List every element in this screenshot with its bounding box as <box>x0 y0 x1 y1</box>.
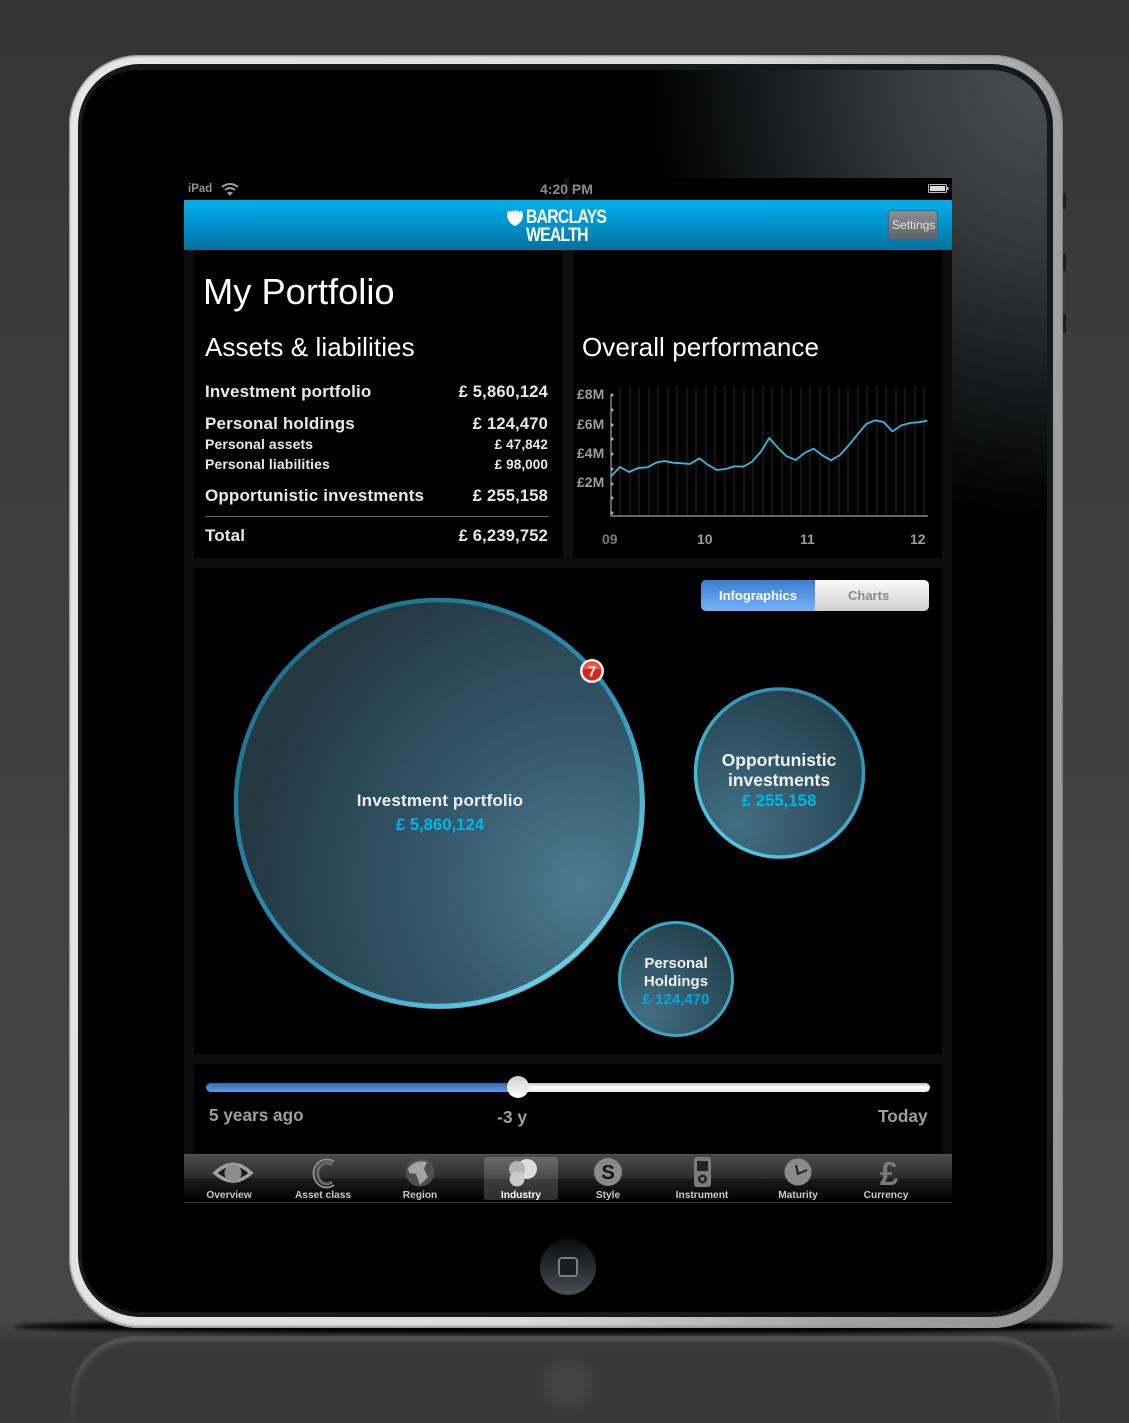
title: My Portfolio <box>203 271 395 312</box>
logo text <box>526 207 606 246</box>
slider knob <box>507 1076 529 1098</box>
badge <box>580 659 604 683</box>
carrier label: iPad <box>188 183 212 195</box>
tab label: Style <box>596 1190 620 1201</box>
tab icons <box>212 1155 899 1190</box>
tab label: Overview <box>206 1190 252 1201</box>
row value: £ 98,000 <box>495 457 548 472</box>
line chart: 10 <box>697 531 713 547</box>
row value: £ 255,158 <box>473 487 548 505</box>
panel: assets <box>194 250 563 558</box>
bubble: opportunistic investments <box>696 689 864 857</box>
tab label: Instrument <box>676 1190 728 1201</box>
heading: assets: Assets & liabilities <box>205 332 415 362</box>
tabs: infographics selected <box>701 580 815 611</box>
industry tab highlight <box>484 1157 558 1200</box>
status bar <box>184 178 952 200</box>
icon: clock <box>784 1158 812 1186</box>
bubble labels: Holdings <box>644 973 708 990</box>
tabs: charts <box>815 580 929 611</box>
badge: 7 <box>588 664 596 680</box>
divider <box>205 516 549 517</box>
panel: slider <box>194 1064 942 1154</box>
icon: industry circles <box>509 1159 537 1186</box>
line chart: £6M <box>577 416 604 432</box>
line chart: 12 <box>910 531 926 547</box>
glare <box>82 70 1047 670</box>
bubble labels: investments <box>728 770 830 790</box>
table: assets and liabilities <box>205 382 549 545</box>
heading: performance: Overall performance <box>582 332 819 362</box>
device bezel <box>78 64 1053 1317</box>
row label: Personal liabilities <box>205 456 330 472</box>
panel: infographic <box>194 568 942 1054</box>
row label: Investment portfolio <box>205 382 371 401</box>
side buttons <box>1063 193 1066 209</box>
device reflection <box>70 1336 1060 1409</box>
settings button <box>888 210 938 240</box>
logo text: BARCLAYS <box>526 207 606 228</box>
line chart: £2M <box>577 474 604 490</box>
row value: £ 5,860,124 <box>459 383 548 401</box>
screen <box>184 178 952 1203</box>
slider start label: 5 years ago <box>209 1105 304 1125</box>
bubble: personal holdings <box>620 922 732 1036</box>
tab label: Currency <box>864 1190 908 1201</box>
clock: 4:20 PM <box>540 181 593 197</box>
line chart: £4M <box>577 445 604 461</box>
row value: £ 124,470 <box>473 415 548 433</box>
row label: Opportunistic investments <box>205 486 424 505</box>
tab label: Asset class <box>295 1190 351 1201</box>
tab bar background <box>184 1154 952 1203</box>
reflection of home button <box>544 1360 592 1408</box>
side buttons lower <box>1063 254 1066 333</box>
bubble labels <box>357 750 837 1008</box>
icon: asset class <box>314 1160 334 1188</box>
row label: Personal assets <box>205 436 313 452</box>
slider track filled <box>206 1083 518 1092</box>
panel: performance <box>573 250 942 558</box>
icon: style S: S <box>601 1162 615 1184</box>
icon: instrument <box>694 1157 711 1187</box>
line chart <box>577 386 928 547</box>
bubble: investment portfolio <box>235 599 645 1009</box>
bubble labels: Opportunistic <box>722 750 837 770</box>
line chart: £8M <box>577 386 604 402</box>
bubble labels: £ 5,860,124 <box>396 816 485 834</box>
device frame <box>69 55 1063 1328</box>
line chart: 09 <box>602 531 618 547</box>
bubbles <box>234 598 866 1037</box>
settings button: Settings <box>892 218 935 232</box>
device glass <box>82 70 1047 1312</box>
icon: eye <box>215 1164 251 1182</box>
icon: style S <box>594 1158 622 1186</box>
tab label: Region <box>403 1190 437 1201</box>
tabs: charts: Charts <box>848 588 889 603</box>
slider current value: -3 y <box>497 1107 527 1127</box>
line chart: 11 <box>800 531 815 547</box>
status bar seam <box>564 178 569 200</box>
header bar <box>184 200 952 250</box>
slider end label: Today <box>878 1106 928 1126</box>
row value: £ 47,842 <box>495 437 548 452</box>
icon: eagle logo <box>507 209 523 226</box>
row label: Total <box>205 526 245 545</box>
tab label: Maturity <box>778 1190 818 1201</box>
icon: globe <box>406 1158 434 1186</box>
logo text: WEALTH <box>526 224 588 246</box>
icon: wifi <box>222 183 238 196</box>
bubble labels: Investment portfolio <box>357 791 523 810</box>
row label: Personal holdings <box>205 414 355 433</box>
bubble labels: £ 255,158 <box>742 791 816 810</box>
bubble labels: £ 124,470 <box>643 991 709 1008</box>
tabs: infographics selected: Infographics <box>719 588 797 603</box>
icon: battery <box>928 184 948 193</box>
home button square <box>558 1257 578 1277</box>
shadow under device <box>14 1319 1114 1334</box>
tab label: Industry <box>501 1190 541 1201</box>
slider track remaining <box>510 1083 930 1092</box>
home button <box>540 1239 596 1295</box>
bubble labels: Personal <box>644 955 708 972</box>
row value: £ 6,239,752 <box>459 527 548 545</box>
